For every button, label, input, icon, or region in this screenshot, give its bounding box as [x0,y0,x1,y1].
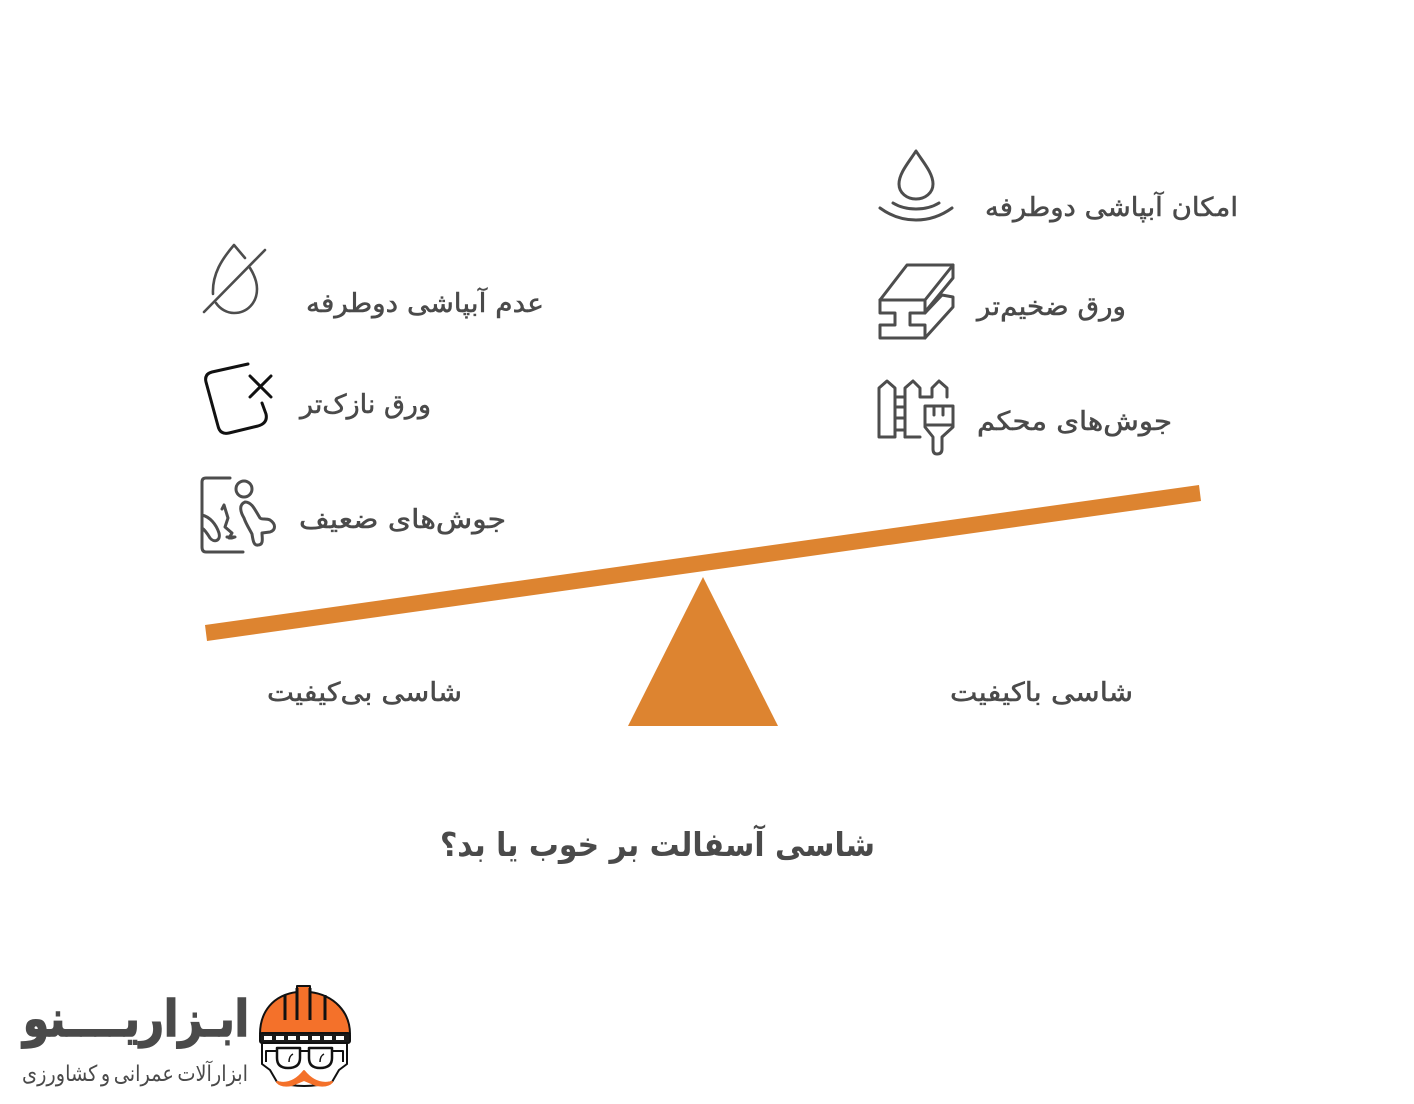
logo wordmark: ابـزاریــــنو [20,990,249,1049]
logo mascot: helmet face [260,986,350,1086]
label: quality chassis: شاسی باکیفیت [950,678,1133,708]
label: thicker sheet: ورق ضخیم‌تر [975,292,1126,322]
label: no two-way irrigation: عدم آبپاشی دوطرفه [306,287,544,319]
icon: steel sheet beam [880,265,953,338]
icon: fence and paint brush [879,381,953,454]
logo tagline: ابزارآلات عمرانی و کشاورزی [22,1060,248,1087]
seesaw beam [205,485,1201,641]
seesaw triangle fulcrum [628,577,778,726]
label: two-way irrigation possible: امکان آبپاشی دوطرفه [985,191,1238,223]
label: thinner sheet: ورق نازک‌تر [298,390,431,420]
label: strong welds: جوش‌های محکم [977,407,1172,437]
icon: crossed-out water drop [204,245,265,313]
icon: weak weld with crack and falling person [202,478,274,552]
label: weak welds: جوش‌های ضعیف [299,505,506,535]
title: شاسی آسفالت بر خوب یا بد؟ [440,824,875,865]
icon: water drop with ripples [880,151,952,220]
label: poor-quality chassis: شاسی بی‌کیفیت [267,678,462,708]
icon: thin sheet with cross [206,364,271,433]
logo [20,986,350,1087]
